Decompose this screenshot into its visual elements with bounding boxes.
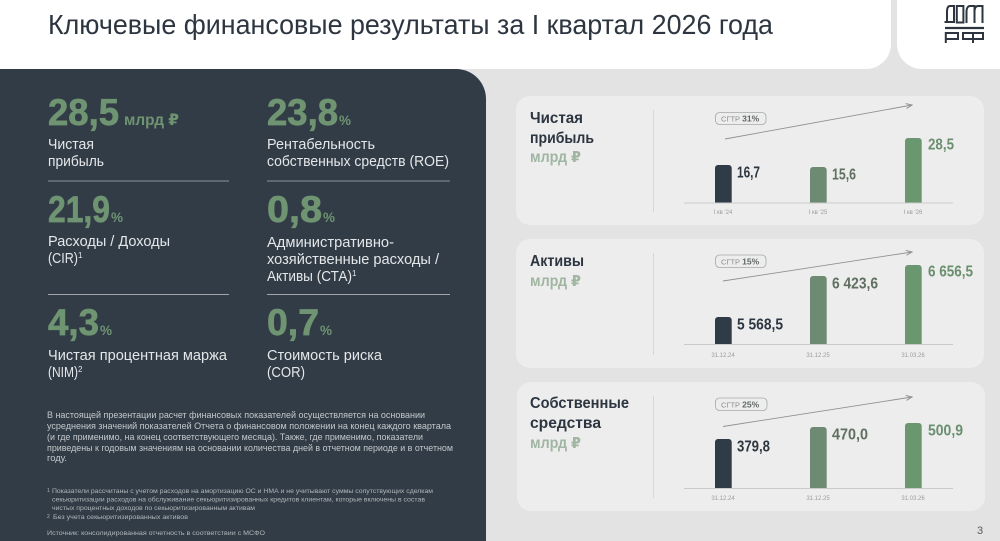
bar chart: net profit: I кв '26	[904, 210, 923, 216]
title: Ключевые финансовые результаты за I квартал 2026 года	[48, 9, 774, 40]
methodology note: В настоящей презентации расчет финансовых показателей осуществляется на основании	[47, 410, 425, 420]
metric: NIM: 2	[78, 365, 83, 374]
icon: DOM.RF logo	[945, 6, 984, 43]
arrow: growth trend	[725, 105, 912, 139]
bar chart: equity: 500,9	[928, 422, 963, 440]
bar chart: net profit: I кв '24	[714, 210, 733, 216]
footnotes: секьюритизации расходов на обслуживание секьюритизированных кредитов клиентам, которые включены в состав	[52, 496, 426, 504]
growth pill: СГТР 31%	[721, 114, 760, 124]
header band	[0, 0, 891, 69]
metric: COR: %	[320, 322, 333, 338]
card heading: Активы	[530, 253, 584, 270]
growth pill	[716, 112, 766, 124]
card heading	[530, 110, 594, 166]
bar chart: equity	[684, 422, 963, 502]
metric: COR: (COR)	[267, 365, 305, 381]
page number: 3	[977, 525, 983, 537]
metric: CTA: 0,8	[267, 189, 322, 230]
metric: CIR: Расходы / Доходы	[48, 234, 170, 250]
methodology note: приведены к годовым значениям на основании количества дней в отчетном периоде и в отчетном	[47, 443, 453, 453]
growth pill	[716, 255, 766, 268]
arrow: growth trend	[723, 397, 912, 426]
metric: CIR: %	[111, 209, 124, 225]
metric: NIM	[48, 302, 228, 381]
panel: key metrics	[0, 69, 486, 541]
card heading	[530, 253, 584, 290]
card heading: Собственные	[530, 395, 629, 412]
card heading: млрд ₽	[530, 435, 581, 452]
metric: ROE: 23,8	[267, 92, 338, 133]
metric: NIM: %	[100, 322, 113, 338]
bar chart: assets: 6 656,5	[928, 264, 973, 280]
methodology note: усреднения значений показателей Отчета о финансовом положении на конец каждого квартала	[47, 421, 452, 431]
bar chart: assets	[684, 264, 973, 359]
bar chart: equity: 31.12.25	[806, 496, 830, 502]
metric: ROE	[267, 92, 449, 170]
footnotes: чистых процентных доходов по секьюритизированным активам	[52, 505, 255, 512]
bar chart: assets: 5 568,5	[737, 316, 783, 334]
methodology note: (и где применимо, на конец соответствующего месяца). Также, где применимо, показатели	[47, 432, 423, 442]
metric: CIR: (CIR)	[48, 251, 78, 267]
footnotes: 2	[47, 514, 50, 520]
source: Источник: консолидированная отчетность в соответствии с МСФО	[47, 530, 265, 537]
footnotes	[47, 488, 433, 521]
panel: equity	[517, 382, 985, 511]
card heading: прибыль	[530, 130, 594, 147]
bar chart: net profit: I кв '25	[809, 210, 828, 216]
bar chart: assets: 6 423,6	[832, 276, 878, 292]
bar chart: assets: 31.03.26	[901, 353, 925, 359]
metric: CIR	[48, 189, 170, 267]
bar chart: net profit: 28,5	[928, 136, 954, 154]
metric: NIM: 4,3	[48, 302, 99, 343]
metric: ROE: %	[339, 112, 352, 128]
metric: CTA: 1	[352, 269, 357, 278]
bar chart: equity: 470,0	[832, 426, 868, 444]
growth pill: СГТР 25%	[721, 400, 760, 410]
metric: CTA	[267, 189, 440, 285]
metric: NIM: (NIM)	[48, 365, 78, 381]
metric: CIR: 1	[78, 251, 83, 260]
metric: net profit: Чистая	[48, 137, 94, 153]
bar chart: equity: 379,8	[737, 438, 770, 456]
metric: net profit: 28,5	[48, 92, 119, 133]
metric: ROE: собственных средств (ROE)	[267, 154, 449, 170]
panel: net profit	[516, 96, 984, 225]
card heading: средства	[530, 415, 601, 432]
metric: COR: 0,7	[267, 302, 319, 343]
bar chart: net profit: 16,7	[737, 164, 760, 182]
card heading: млрд ₽	[530, 149, 581, 166]
panel: assets	[516, 239, 984, 368]
metric: ROE: Рентабельность	[267, 137, 375, 153]
metric: net profit	[48, 92, 179, 170]
card heading: Чистая	[530, 110, 583, 127]
bar chart: net profit	[684, 136, 954, 216]
metric: CIR: 21,9	[48, 189, 110, 230]
footnotes: Без учета секьюритизированных активов	[53, 514, 189, 521]
arrow: growth trend	[723, 252, 912, 281]
footnotes: Показатели рассчитаны с учетом расходов на амортизацию ОС и НМА и не учитывают суммы сопутствующих сделкам	[52, 488, 433, 495]
bar chart: net profit: 15,6	[832, 166, 856, 184]
bar chart: equity: 31.12.24	[711, 496, 735, 502]
bar chart: equity: 31.03.26	[901, 496, 925, 502]
metric: CTA: хозяйственные расходы /	[267, 252, 440, 268]
metric: net profit: млрд ₽	[124, 112, 179, 129]
card heading: млрд ₽	[530, 273, 581, 290]
bar chart: assets: 31.12.24	[711, 353, 735, 359]
metric: CTA: %	[323, 209, 336, 225]
metric: CTA: Активы (СТА)	[267, 269, 352, 285]
metric: NIM: Чистая процентная маржа	[48, 348, 228, 364]
metric: COR: Стоимость риска	[267, 348, 383, 364]
card heading	[530, 395, 629, 452]
footnotes: 1	[47, 488, 50, 494]
methodology note: году.	[47, 453, 67, 463]
growth pill	[716, 398, 767, 410]
metric: net profit: прибыль	[48, 154, 104, 170]
metric: COR	[267, 302, 383, 381]
logo panel	[897, 0, 1000, 69]
growth pill: СГТР 15%	[721, 256, 760, 266]
methodology note	[47, 410, 453, 463]
metric: CTA: Административно-	[267, 235, 394, 251]
bar chart: assets: 31.12.25	[806, 353, 830, 359]
